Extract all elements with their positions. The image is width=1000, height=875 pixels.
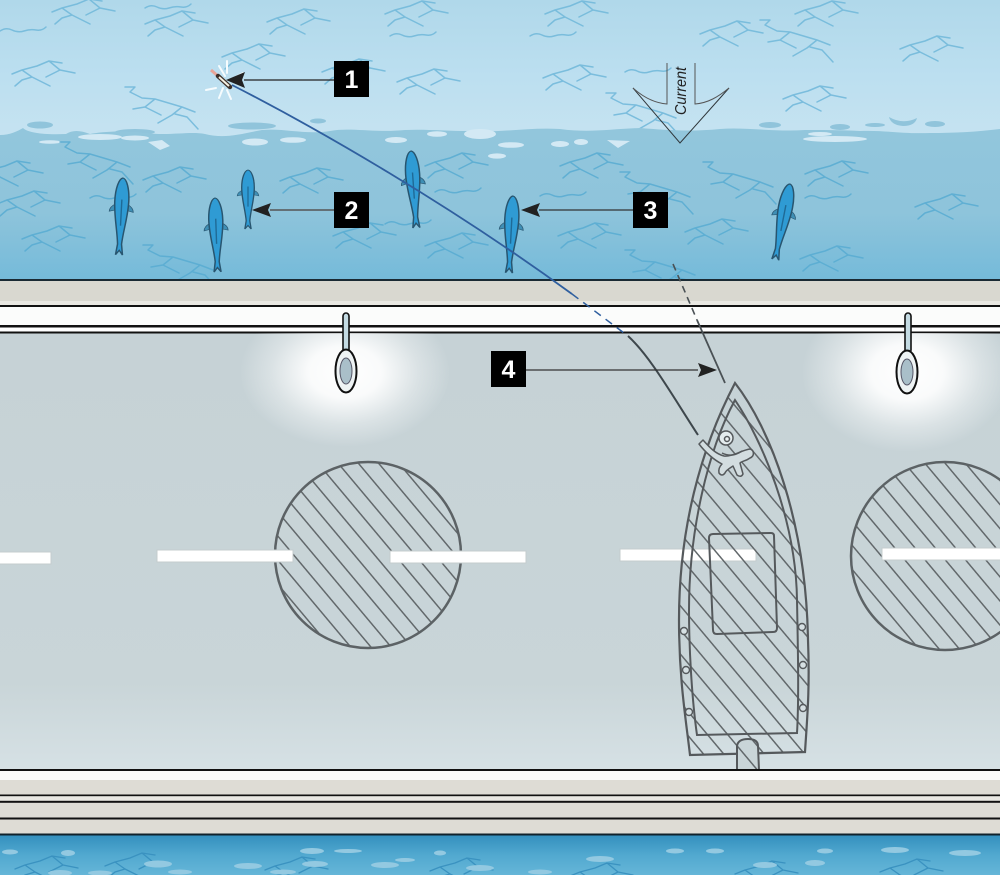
boat hull (679, 383, 809, 755)
anchor line (673, 264, 725, 383)
lure with splash (206, 61, 243, 99)
road dashes (0, 548, 1000, 564)
callout 3 (521, 192, 668, 228)
water: lower band (0, 836, 1000, 875)
bridge light left (336, 313, 356, 392)
hatched circle: bridge pier left (275, 462, 461, 648)
shoreline dark shoals (27, 117, 945, 135)
current label: Current (673, 67, 690, 115)
boat console (709, 533, 777, 634)
angler (699, 431, 753, 476)
callout 4 (491, 351, 717, 387)
boat inner gunwale (689, 400, 798, 735)
water: upper shallow band (0, 0, 1000, 140)
bridge lower railing (0, 769, 1000, 836)
boat (679, 383, 809, 770)
rod holders (680, 624, 806, 716)
fishing line: blue section to lure (232, 85, 572, 294)
water: deeper channel band (0, 117, 1000, 292)
fishing rod (628, 336, 698, 435)
fish school (107, 150, 802, 274)
bridge light right (896, 313, 918, 394)
current direction arrow (633, 63, 729, 143)
bridge upper railing (0, 279, 1000, 334)
callout 1 (226, 61, 369, 97)
hatched circle: bridge pier right (851, 462, 1000, 650)
bridge deck (0, 292, 1000, 770)
callout 3: 3 (644, 197, 657, 225)
fishing line: dashed underwater section (572, 294, 628, 336)
callout 1: 1 (345, 66, 359, 94)
callout 4: 4 (502, 356, 516, 384)
shoreline light blobs (39, 129, 867, 159)
callout 2: 2 (345, 197, 358, 225)
outboard motor (737, 739, 759, 770)
callout 2 (252, 192, 369, 228)
